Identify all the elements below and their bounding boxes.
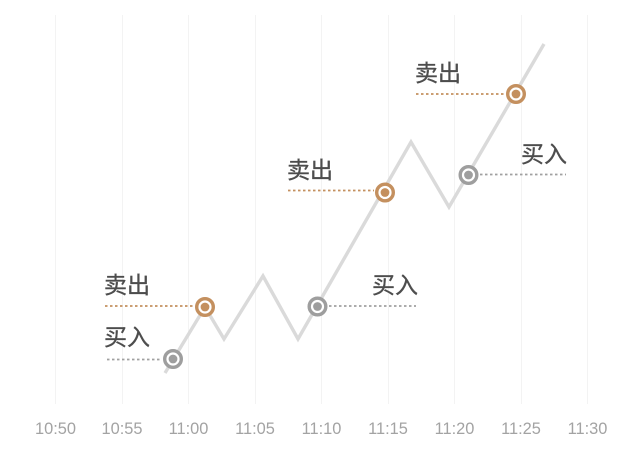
- buy signal 2: 买入: [372, 272, 418, 298]
- sell signal 2: [287, 157, 393, 201]
- buy signal 1: [104, 324, 181, 367]
- sell signal 3: [415, 60, 524, 102]
- sell signal 1: 卖出: [104, 272, 150, 298]
- buy signal 3: [460, 141, 567, 183]
- time axis labels: 11:00: [169, 420, 208, 438]
- sell signal 3: 卖出: [415, 60, 461, 86]
- sell signal 1: [104, 272, 213, 315]
- time axis labels: 10:55: [101, 420, 143, 438]
- time axis labels: 11:25: [501, 420, 541, 438]
- time axis labels: 11:15: [368, 420, 408, 438]
- time axis labels: 11:05: [235, 420, 275, 438]
- time axis labels: [35, 420, 607, 438]
- time axis labels: 11:10: [302, 420, 341, 438]
- time axis labels: 11:20: [435, 420, 474, 438]
- buy signal 3: 买入: [521, 141, 567, 167]
- price line: [165, 44, 544, 373]
- buy signal 1: 买入: [104, 324, 150, 350]
- time axis labels: 10:50: [35, 420, 76, 438]
- buy signal 2: [309, 272, 418, 315]
- sell signal 2: 卖出: [287, 157, 333, 183]
- time axis labels: 11:30: [568, 420, 607, 438]
